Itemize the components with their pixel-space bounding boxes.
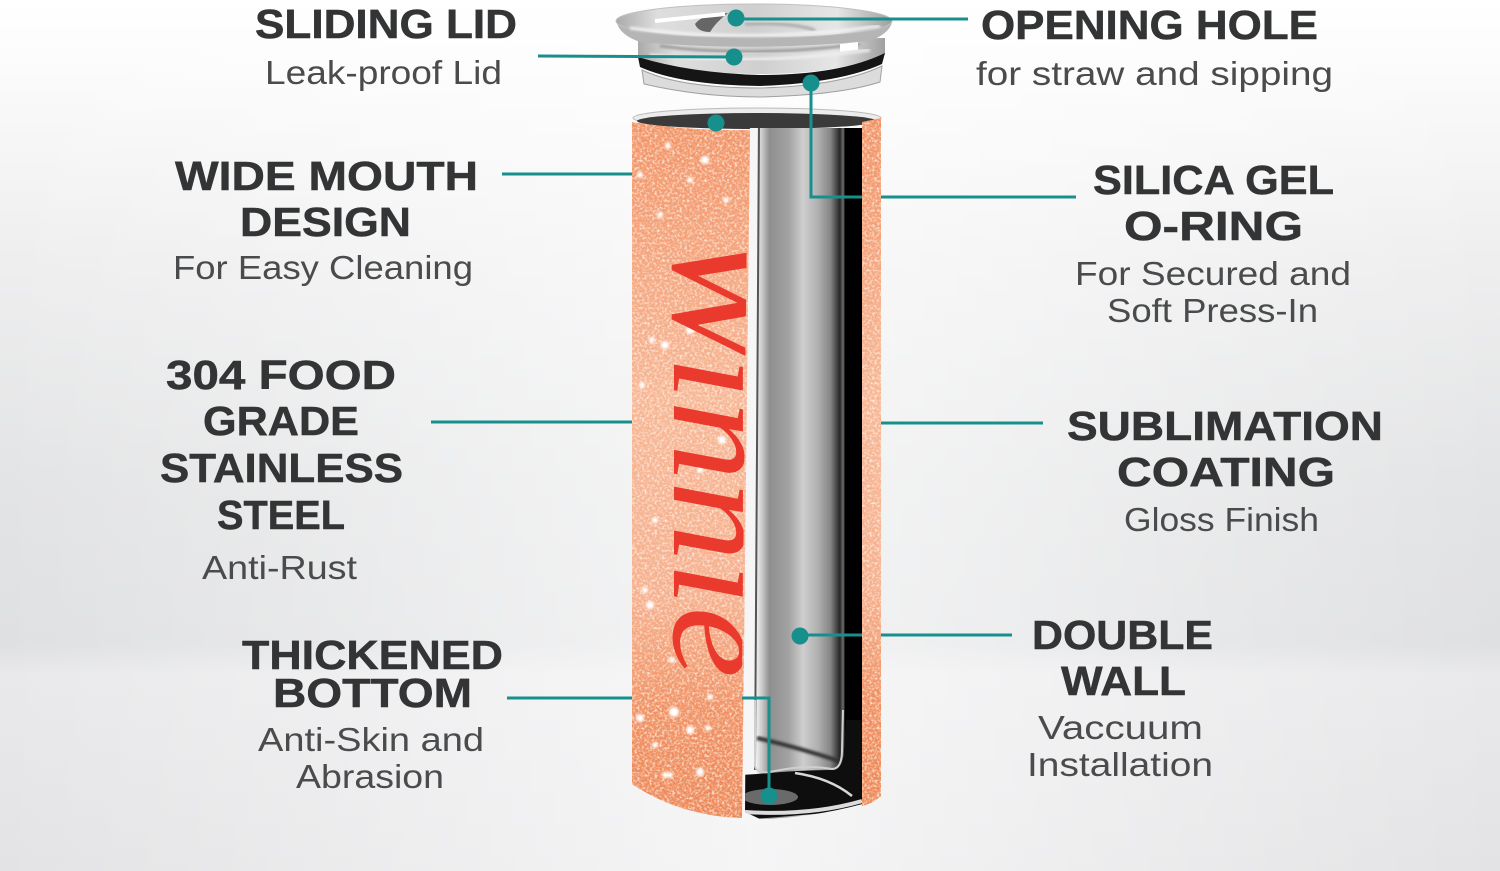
callout: wide mouth design: WIDE MOUTH — [175, 153, 478, 199]
callout: wide mouth design: DESIGN — [240, 199, 411, 245]
callout: sliding lid: SLIDING LID — [255, 1, 517, 47]
steel rim and inner wall — [633, 108, 881, 820]
callout: double wall: Vaccuum — [1038, 709, 1203, 746]
callout: double wall — [792, 612, 1213, 783]
callout: 304 food grade stainless steel: Anti-Rust — [202, 549, 357, 586]
callout: silica gel o-ring: For Secured and — [1075, 255, 1351, 292]
callout: wide mouth design: For Easy Cleaning — [173, 249, 473, 286]
callout: wide mouth design — [173, 114, 724, 286]
callout: sublimation coating — [881, 403, 1383, 538]
callout: sublimation coating: COATING — [1117, 449, 1335, 495]
callout: thickened bottom: Abrasion — [296, 758, 444, 795]
callout: opening hole: OPENING HOLE — [981, 2, 1318, 48]
callout: 304 food grade stainless steel: STEEL — [217, 492, 345, 538]
callout: 304 food grade stainless steel: STAINLESS — [160, 445, 403, 491]
callout: silica gel o-ring — [802, 74, 1351, 329]
callout: silica gel o-ring: Soft Press-In — [1107, 292, 1318, 329]
callout: thickened bottom: BOTTOM — [273, 670, 472, 716]
callout: double wall: WALL — [1061, 658, 1186, 704]
callout: silica gel o-ring: SILICA GEL — [1093, 157, 1334, 203]
callout: sliding lid: Leak-proof Lid — [265, 54, 502, 91]
glitter coating left — [632, 118, 752, 820]
lid — [616, 4, 892, 97]
callout: sublimation coating: SUBLIMATION — [1067, 403, 1383, 449]
callout: sliding lid — [255, 1, 742, 91]
tumbler illustration — [616, 4, 892, 820]
callout: double wall: DOUBLE — [1032, 612, 1213, 658]
callout: 304 food grade stainless steel: 304 FOOD — [166, 352, 396, 398]
callout: sublimation coating: Gloss Finish — [1124, 501, 1319, 538]
callout: thickened bottom: THICKENED — [242, 632, 503, 678]
callout: 304 food grade stainless steel — [160, 352, 632, 586]
callout: double wall: Installation — [1027, 746, 1213, 783]
name script: Winnie — [641, 230, 807, 678]
callout: thickened bottom — [242, 632, 778, 804]
glitter coating right — [862, 118, 882, 808]
callout: silica gel o-ring: O-RING — [1124, 203, 1303, 249]
callout: opening hole: for straw and sipping — [976, 55, 1333, 92]
callout: opening hole — [728, 2, 1333, 92]
callout: 304 food grade stainless steel: GRADE — [203, 398, 359, 444]
callout: thickened bottom: Anti-Skin and — [258, 721, 484, 758]
